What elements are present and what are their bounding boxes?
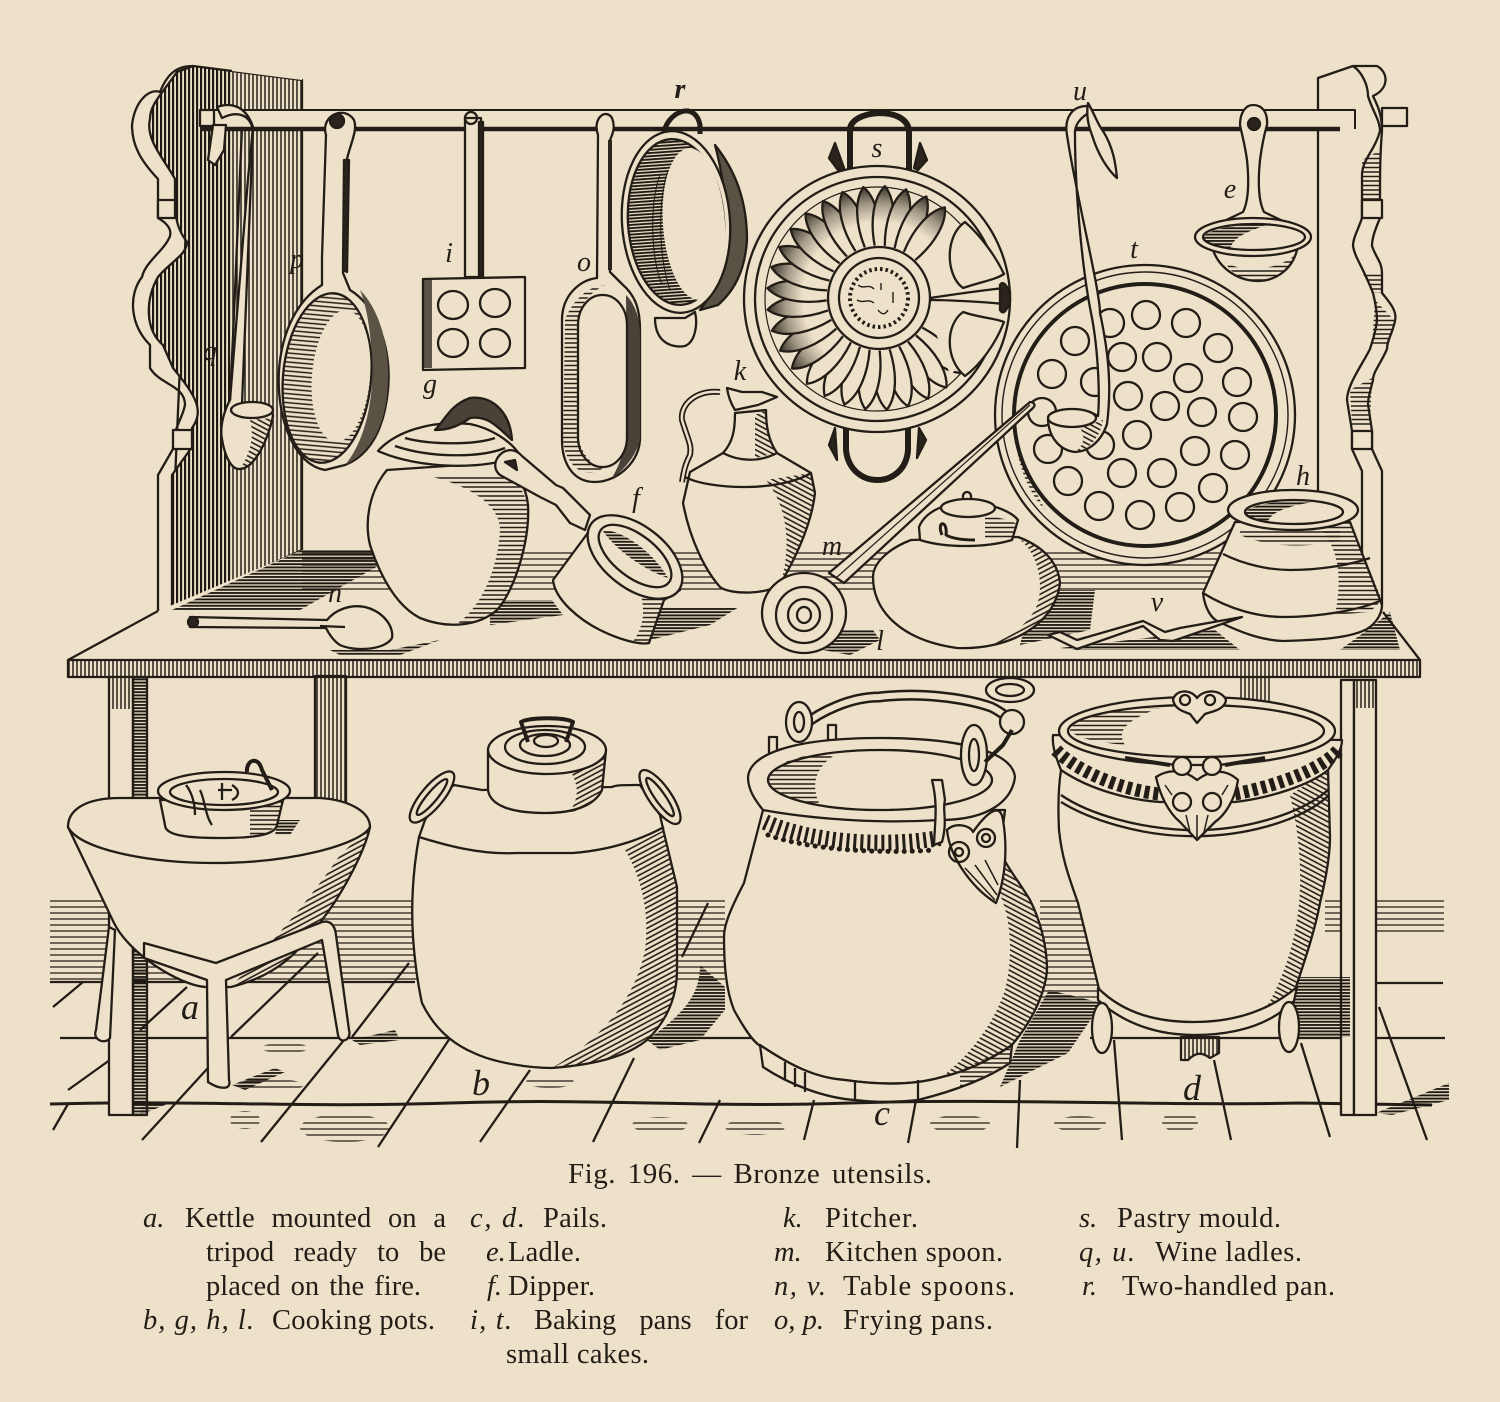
figure caption: Fig. 196. — Bronze utensils. [568, 1158, 932, 1190]
legend column 1: a. [143, 1203, 164, 1234]
legend column 2: Pails. [543, 1203, 607, 1234]
legend column 3: m. [774, 1237, 802, 1268]
item letters on the illustration: u [1073, 76, 1087, 107]
ladle e [1195, 105, 1311, 281]
spoon v [1048, 617, 1242, 649]
item letters on the illustration: o [577, 247, 591, 278]
frying pan o [562, 114, 640, 482]
two-handled pan r [616, 111, 747, 346]
dipper f [495, 450, 697, 643]
legend column 4: r. [1082, 1271, 1097, 1302]
front right leg [1341, 680, 1376, 1115]
tabletop [68, 550, 1420, 677]
legend column 4: Two-handled pan. [1122, 1271, 1335, 1302]
legend column 3: Pitcher. [825, 1203, 918, 1234]
right rail peg [1382, 108, 1407, 126]
back left leg [315, 676, 346, 803]
legend column 1: Kettle mounted on a [185, 1203, 446, 1234]
item letters on the illustration: d [1183, 1068, 1202, 1108]
hanging utensils [208, 103, 1311, 565]
item letters on the illustration: a [181, 987, 199, 1027]
item letters on the illustration: s [872, 133, 883, 164]
legend column 3 [774, 1203, 1015, 1336]
pitcher k [682, 388, 815, 593]
legend column 2: i, t. [470, 1305, 512, 1336]
legend column 2: e. [486, 1237, 506, 1268]
item letters on the illustration: f [632, 483, 643, 514]
baking pan t [995, 265, 1295, 565]
cooking pot b [403, 718, 725, 1068]
item letters on the illustration: v [1151, 587, 1164, 618]
legend column 1 [143, 1203, 446, 1336]
back hatch under right of table [1240, 677, 1272, 702]
legend column 4: s. [1079, 1203, 1097, 1234]
legend column 2: Baking pans for [534, 1305, 748, 1336]
floor [50, 897, 1449, 1148]
cooking pot g [368, 398, 528, 625]
legend column 2: Dipper. [508, 1271, 595, 1302]
item letters on the illustration [181, 74, 1310, 1133]
pastry mould s [744, 113, 1010, 480]
tripod stand and kettle a [68, 761, 400, 1090]
item letters on the illustration: m [822, 531, 842, 562]
pail d [1053, 691, 1350, 1060]
legend column 1: tripod ready to be [206, 1237, 446, 1268]
item letters on the illustration: n [328, 578, 342, 609]
legend column 3: Table spoons. [843, 1271, 1015, 1302]
legend column 2: f. [487, 1271, 502, 1302]
cooking pot l [873, 492, 1060, 648]
legend column 2: c, d. [470, 1203, 525, 1234]
legend column 3: Frying pans. [843, 1305, 993, 1336]
right upright board [1318, 66, 1395, 605]
pail c [724, 678, 1102, 1102]
legend column 1: Cooking pots. [272, 1305, 435, 1336]
legend column 1: b, g, h, l. [143, 1305, 254, 1336]
legend [143, 1203, 1335, 1370]
baking pan i [423, 112, 525, 370]
item letters on the illustration: h [1296, 461, 1310, 492]
item letters on the illustration: i [445, 238, 453, 269]
legend column 4: q, u. [1079, 1237, 1135, 1268]
cooking pot h [1203, 490, 1382, 641]
hanging rail [200, 110, 1355, 129]
item letters on the illustration: e [1224, 174, 1236, 205]
legend column 2: small cakes. [506, 1339, 649, 1370]
shelf with boards, rail and legs [68, 60, 1420, 1115]
item letters on the illustration: p [288, 244, 304, 275]
item letters on the illustration: r [675, 74, 687, 105]
legend column 2: Ladle. [508, 1237, 581, 1268]
legend column 4: Pastry mould. [1117, 1203, 1281, 1234]
item letters on the illustration: l [876, 626, 884, 657]
utensils on the table [188, 388, 1382, 653]
kitchen spoon m [762, 402, 1034, 653]
legend column 4: Wine ladles. [1155, 1237, 1302, 1268]
item letters on the illustration: g [423, 369, 437, 400]
frying pan p [276, 113, 389, 470]
legend column 4 [1079, 1203, 1335, 1302]
vessels under the table [68, 678, 1350, 1102]
item letters on the illustration: b [472, 1063, 490, 1103]
legend column 1: placed on the fire. [206, 1271, 421, 1302]
ladle q [208, 105, 273, 469]
legend column 3: o, p. [774, 1305, 824, 1336]
legend column 3: k. [783, 1203, 803, 1234]
ladle u [1048, 103, 1117, 452]
front left leg [109, 677, 147, 1115]
legend column 2 [470, 1203, 748, 1370]
legend column 3: n, v. [774, 1271, 826, 1302]
legend column 3: Kitchen spoon. [825, 1237, 1003, 1268]
spoon n [188, 606, 392, 649]
item letters on the illustration: t [1130, 234, 1139, 265]
item letters on the illustration: q [203, 336, 217, 367]
item letters on the illustration: c [874, 1093, 890, 1133]
left upright board [132, 60, 302, 611]
item letters on the illustration: k [734, 356, 747, 387]
